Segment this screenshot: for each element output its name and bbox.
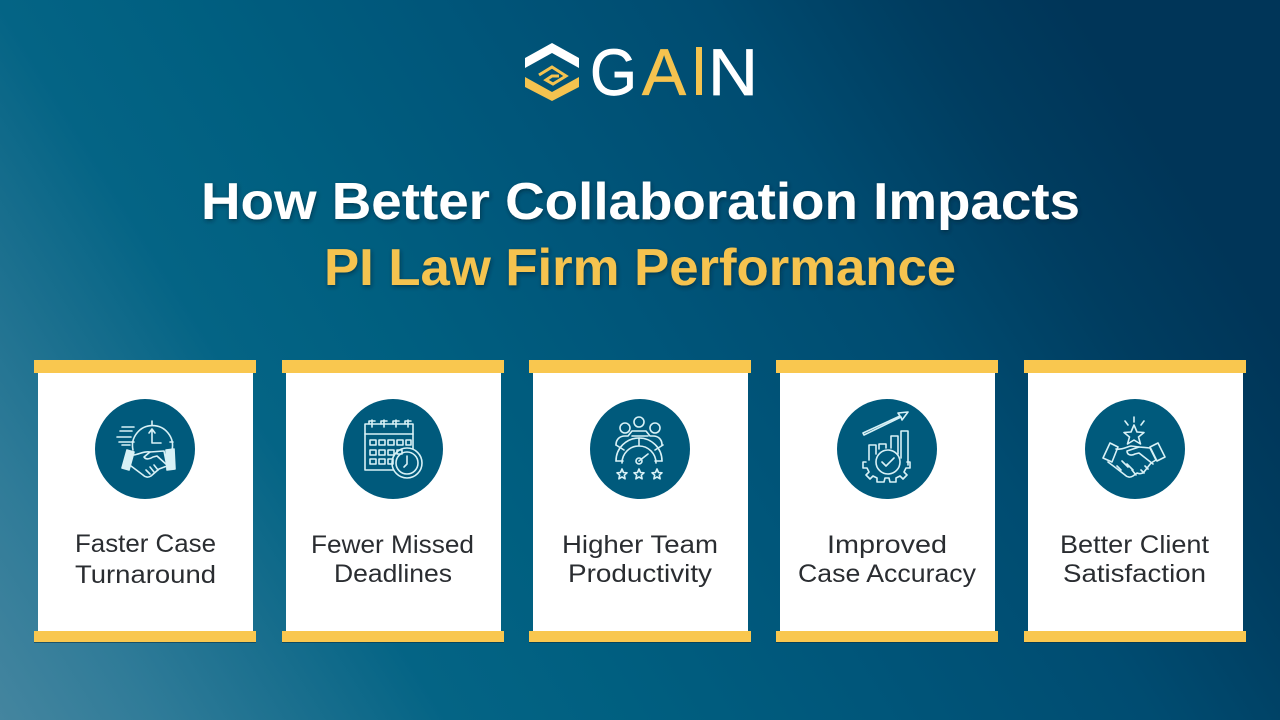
logo: GAIN [525, 35, 758, 109]
panel: faster case turnaround: Faster Case [75, 530, 216, 558]
panel: fewer missed deadlines: Deadlines [334, 560, 452, 588]
title: How Better Collaboration Impacts [201, 173, 1080, 231]
title [201, 173, 1080, 297]
title: PI Law Firm Performance [324, 239, 956, 297]
logo: GAIN: A [642, 35, 686, 109]
panel: higher team productivity: Productivity [568, 560, 713, 588]
panel: fewer missed deadlines: Fewer Missed [311, 531, 474, 559]
panel: higher team productivity [529, 360, 751, 643]
logo: GAIN: G [590, 35, 637, 109]
panel: higher team productivity: Higher Team [562, 531, 718, 559]
icon: calendar and clock [365, 420, 422, 478]
icon: clock and handshake [117, 421, 175, 477]
panel: improved case accuracy [776, 360, 998, 643]
panel: fewer missed deadlines [282, 360, 504, 643]
panel: faster case turnaround [34, 360, 256, 643]
panel: faster case turnaround: Turnaround [75, 561, 216, 589]
icon: team gauge and stars [616, 417, 663, 479]
icon: growth chart and gear [863, 412, 910, 482]
logo: GAIN: N [708, 35, 758, 109]
icon: handshake and star [1103, 417, 1165, 477]
panel: better client satisfaction [1024, 360, 1246, 643]
panel: better client satisfaction: Satisfaction [1063, 560, 1206, 588]
panel: better client satisfaction: Better Client [1060, 531, 1209, 559]
panel: improved case accuracy: Case Accuracy [798, 560, 977, 588]
panel: improved case accuracy: Improved [827, 531, 947, 559]
